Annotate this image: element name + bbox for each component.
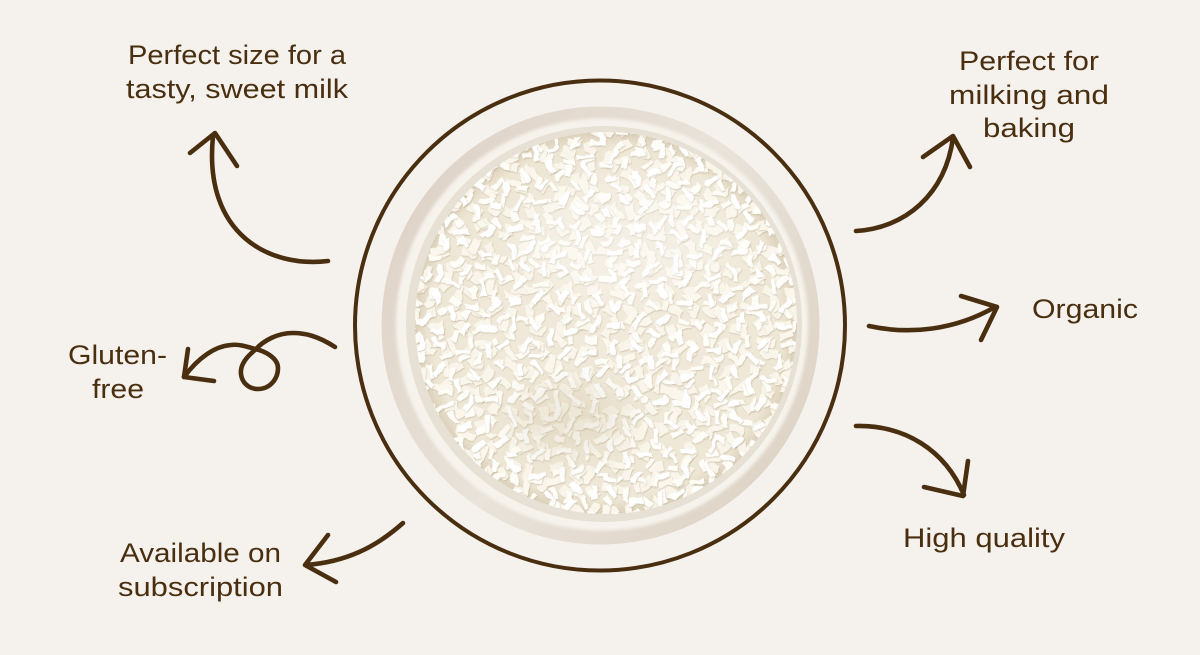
arrow: top left [190,133,328,262]
label: gluten-free: Gluten- [68,340,167,370]
arrow: top right [856,136,970,231]
label: available on subscription: subscription [118,572,283,602]
arrow: gluten-free [184,333,335,389]
arrow: high quality [856,426,968,496]
label: organic: Organic [1032,294,1138,324]
label: available on subscription: Available on [120,538,281,568]
label: milking and baking [949,46,1109,143]
label: available on subscription [118,538,283,602]
label: milking and baking: baking [983,113,1075,143]
arrow: available [305,523,403,582]
bowl with coconut flakes [382,106,820,544]
label: milking and baking: milking and [949,80,1109,110]
label: perfect size: tasty, sweet milk [126,74,349,104]
label: gluten-free: free [92,374,144,404]
arrow: organic [869,296,997,340]
bowl rim [382,106,820,544]
outer ring [355,80,845,570]
label: high quality: High quality [903,523,1066,553]
label: gluten-free [68,340,167,404]
coconut flakes [405,122,807,524]
bowl inner wall [406,126,802,522]
label: perfect size: Perfect size for a [128,40,347,70]
label: perfect size [126,40,349,104]
rim highlight [396,118,808,530]
label: milking and baking: Perfect for [959,46,1099,76]
